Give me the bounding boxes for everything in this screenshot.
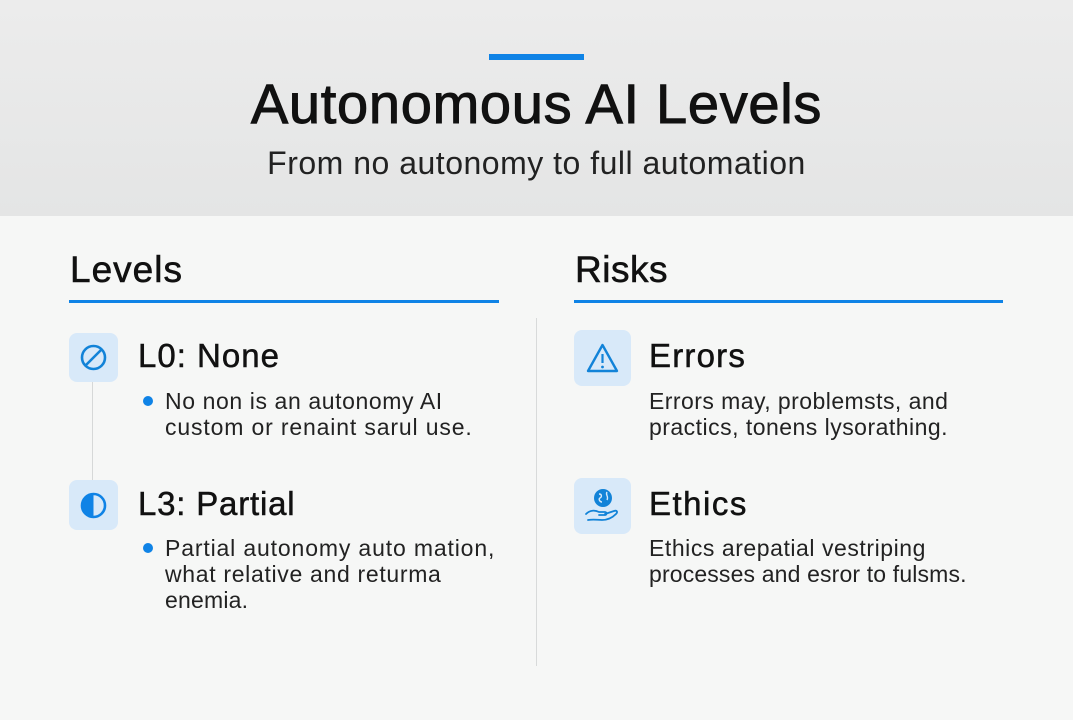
heading: levels: Levels bbox=[70, 249, 183, 290]
description: L3: what relative and returma bbox=[165, 561, 442, 587]
center divider bbox=[536, 318, 537, 666]
bullet bbox=[143, 396, 153, 406]
icon: globe in hand bbox=[574, 478, 631, 534]
panel: risks bbox=[574, 249, 1003, 587]
icon: half circle bbox=[69, 480, 118, 530]
description: L3 bbox=[165, 535, 495, 613]
risk name: errors: Errors bbox=[649, 337, 746, 374]
description: ethics: Ethics arepatial vestriping bbox=[649, 535, 926, 561]
accent bar bbox=[489, 54, 584, 60]
title: Autonomous AI Levels bbox=[251, 72, 822, 135]
icon: no autonomy bbox=[69, 333, 118, 382]
description: errors: Errors may, problemsts, and bbox=[649, 388, 948, 414]
bullet bbox=[143, 543, 153, 553]
description: errors: practics, tonens lysorathing. bbox=[649, 414, 948, 440]
heading rule bbox=[574, 300, 1003, 303]
heading rule bbox=[69, 300, 499, 303]
header band bbox=[0, 0, 1073, 216]
description: ethics: processes and esror to fulsms. bbox=[649, 561, 967, 587]
panel: levels bbox=[69, 249, 499, 613]
connector line bbox=[92, 382, 93, 480]
level name: L3: L3: Partial bbox=[138, 485, 295, 522]
risk name: ethics: Ethics bbox=[649, 485, 748, 522]
description: L0: No non is an autonomy AI bbox=[165, 388, 443, 414]
description: L0 bbox=[165, 388, 473, 440]
icon: warning bbox=[574, 330, 631, 386]
description: ethics bbox=[649, 535, 967, 587]
description: errors bbox=[649, 388, 948, 440]
heading: risks: Risks bbox=[575, 249, 668, 290]
subtitle: From no autonomy to full automation bbox=[267, 145, 806, 181]
description: L3: enemia. bbox=[165, 587, 248, 613]
description: L0: custom or renaint sarul use. bbox=[165, 414, 473, 440]
level name: L0: L0: None bbox=[138, 337, 280, 374]
description: L3: Partial autonomy auto mation, bbox=[165, 535, 495, 561]
